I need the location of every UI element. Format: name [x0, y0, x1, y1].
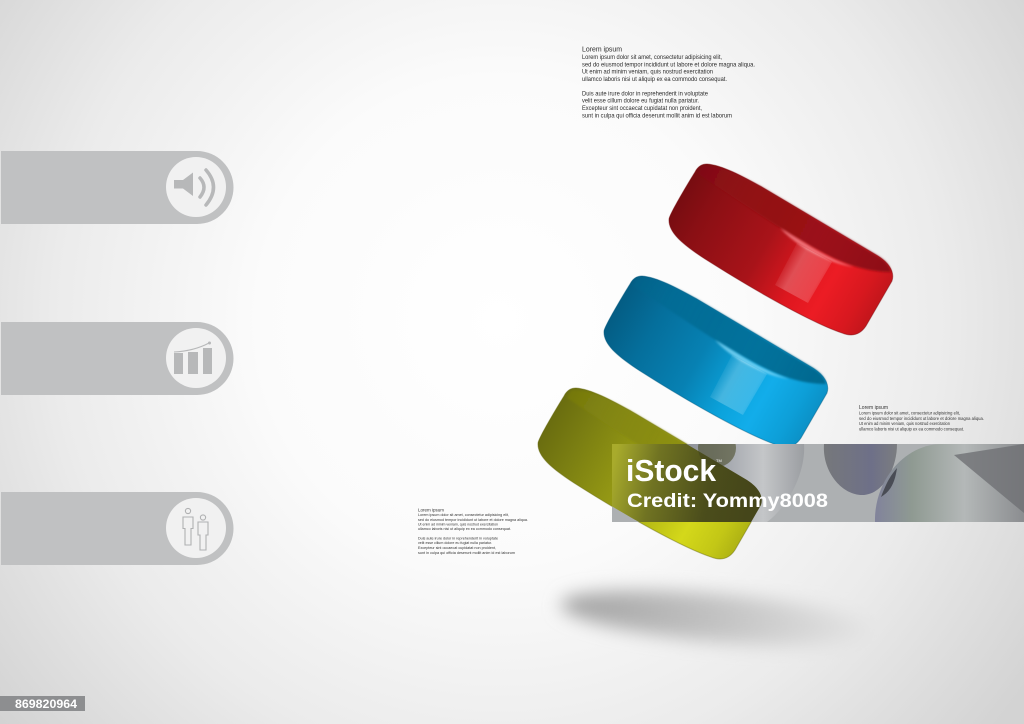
text block: left description: Duis aute irure dolor in reprehenderit in voluptate — [418, 535, 499, 540]
credit text: Credit: Yommy8008 — [627, 491, 828, 512]
text block: right description — [859, 405, 984, 432]
iStock logo text: iStock — [626, 453, 717, 488]
text block: top description: velit esse cillum dolore eu fugiat nulla pariatur. — [582, 98, 699, 105]
text block: top description: sunt in culpa qui officia deserunt mollit anim id est laborum — [582, 112, 732, 119]
text block: top description: Duis aute irure dolor in reprehenderit in voluptate — [582, 90, 709, 97]
text block: right description: Ut enim ad minim veniam, quis nostrud exercitation — [859, 421, 950, 426]
watermark banner: TM — [716, 458, 722, 463]
panel: chart tab — [1, 322, 234, 395]
text block: left description: velit esse cillum dolore eu fugiat nulla pariatur. — [418, 540, 492, 545]
text block: right description: sed do eiusmod tempor incididunt ut labore et dolore magna aliqua. — [859, 416, 984, 421]
icon: two people — [166, 498, 226, 558]
text block: right description: ullamco laboris nisi ut aliquip ex ea commodo consequat. — [859, 427, 964, 432]
icon: speaker — [166, 157, 226, 217]
text block: right description: Lorem ipsum — [859, 405, 888, 411]
text block: top description: Excepteur sint occaecat cupidatat non proident, — [582, 105, 702, 112]
text block: right description: Lorem ipsum dolor sit amet, consectetur adipisicing elit, — [859, 410, 960, 416]
olive cylinder slice — [538, 388, 762, 559]
text block: top description — [582, 46, 755, 119]
text block: top description: ullamco laboris nisi ut aliquip ex ea commodo consequat. — [582, 76, 727, 83]
text block: left description: sunt in culpa qui officia deserunt mollit anim id est laborum — [418, 550, 516, 555]
text block: left description: sed do eiusmod tempor incididunt ut labore et dolore magna aliqua. — [418, 517, 528, 522]
ground shadow — [559, 580, 877, 656]
text block: top description: Ut enim ad minim veniam, quis nostrud exercitation — [582, 69, 714, 76]
text block: left description: Ut enim ad minim veniam, quis nostrud exercitation — [418, 521, 498, 526]
panel: speaker tab — [1, 151, 234, 224]
watermark banner — [612, 444, 1024, 522]
text block: left description: Lorem ipsum — [418, 508, 444, 514]
text block: top description: Lorem ipsum dolor sit amet, consectetur adipisicing elit, — [582, 54, 722, 61]
icon: bar chart — [166, 328, 226, 388]
red cylinder slice — [669, 164, 893, 335]
text block: left description: ullamco laboris nisi ut aliquip ex ea commodo consequat. — [418, 526, 511, 531]
panel: people tab — [1, 492, 234, 565]
text block: left description: Excepteur sint occaecat cupidatat non proident, — [418, 545, 496, 550]
text block: left description: Lorem ipsum dolor sit amet, consectetur adipisicing elit, — [418, 512, 509, 517]
text block: top description: sed do eiusmod tempor incididunt ut labore et dolore magna aliqua. — [582, 61, 755, 68]
image id tag — [0, 696, 85, 711]
text block: left description — [418, 508, 528, 555]
text block: top description: Lorem ipsum — [582, 46, 622, 54]
blue cylinder slice — [604, 276, 828, 447]
image id tag: 869820964 — [15, 699, 78, 711]
